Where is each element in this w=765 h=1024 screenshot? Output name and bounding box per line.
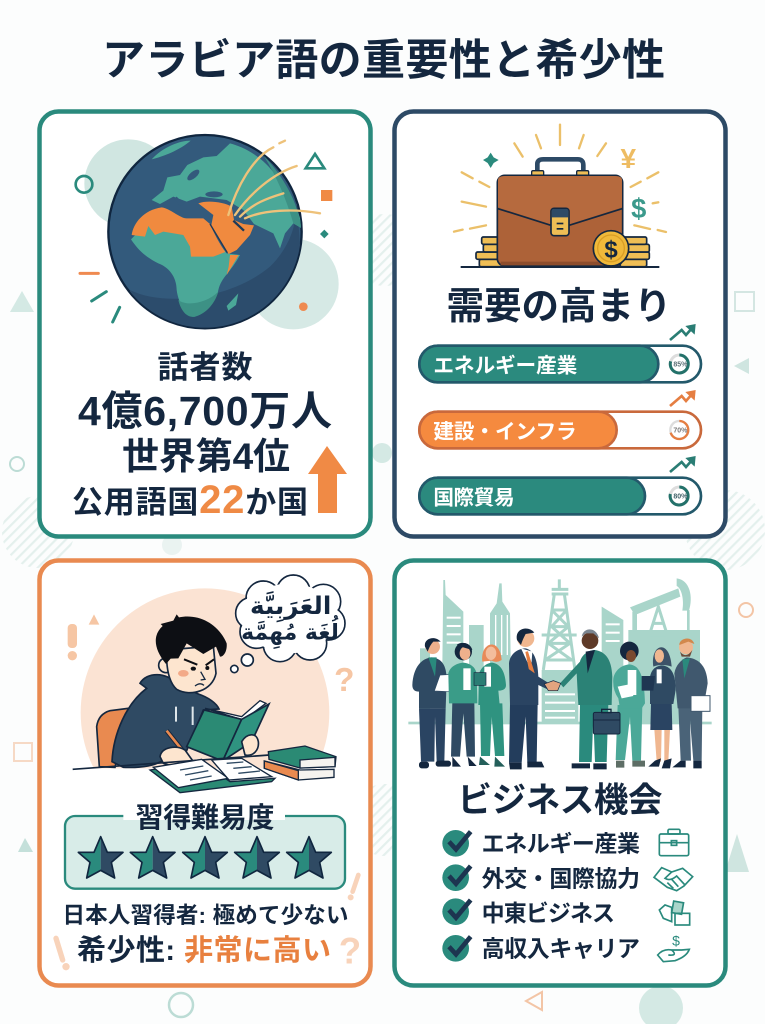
person 6 (613, 642, 645, 768)
panel: speakers (40, 112, 370, 536)
checklist item: high income career (442, 933, 689, 962)
person 2 (448, 643, 477, 767)
person 3 (474, 644, 506, 767)
panel: business (394, 560, 726, 986)
icon: briefcase and coins: $ (631, 193, 646, 224)
checklist item: high income career: $ (672, 933, 680, 949)
demand bars (419, 324, 701, 514)
bar: construction 70%: 70% (673, 427, 688, 434)
briefcase (593, 709, 620, 734)
background decorations (2, 214, 765, 1024)
thought bubble with Arabic: لُغَة مُهِمَّة (241, 615, 339, 649)
person 1 (412, 638, 454, 768)
speakers number: 4億6,700万人 (78, 388, 332, 434)
icon: briefcase and coins (454, 125, 666, 267)
bar: construction 70%: 建設・インフラ (433, 420, 577, 443)
checklist item: diplomacy (442, 864, 693, 892)
bar: energy 85% (419, 324, 701, 382)
Japanese learners note: 日本人習得者: 極めて少ない (62, 903, 348, 928)
world rank: 世界第4位 (122, 436, 290, 477)
checklist item: diplomacy: 外交・国際協力 (482, 866, 640, 892)
thought bubble with Arabic (231, 575, 345, 673)
person 5 (560, 629, 612, 769)
bar: energy 85%: エネルギー産業 (433, 354, 578, 377)
icon: orange up arrow (308, 446, 347, 513)
person 8 (672, 639, 710, 768)
difficulty rating box: ? (339, 930, 361, 971)
panel: demand (394, 112, 726, 536)
bar: trade 80%: 国際貿易 (433, 486, 515, 509)
handshake (544, 681, 561, 691)
panel: difficulty (40, 560, 370, 986)
bar: energy 85%: 85% (673, 361, 688, 368)
person 7 (642, 647, 676, 768)
icon: briefcase and coins: ¥ (621, 143, 637, 174)
title: アラビア語の重要性と希少性 (102, 37, 665, 85)
business checklist (442, 829, 693, 962)
skyline (408, 578, 712, 724)
icon: globe with Arabic world highlighted (76, 135, 339, 333)
difficulty heading: 習得難易度 (136, 802, 274, 833)
bar: construction 70% (419, 390, 701, 448)
illustration: student studying Arabic (68, 574, 353, 794)
five stars (78, 837, 331, 878)
business heading: ビジネス機会 (458, 782, 662, 820)
checklist item: energy (442, 829, 689, 857)
difficulty rating box (56, 810, 361, 971)
thought bubble with Arabic: العَرَبِيَّة (250, 590, 331, 623)
person 4 (509, 629, 552, 769)
bar: trade 80%: 80% (673, 493, 688, 500)
checklist item: Middle East business (442, 898, 690, 926)
illustration: skyline and business people (408, 578, 712, 769)
people shaking hands (412, 629, 710, 769)
illustration: student studying Arabic: ? (334, 662, 355, 699)
rarity: 希少性: 非常に高い (77, 934, 331, 967)
speakers label: 話者数 (158, 350, 252, 385)
checklist item: energy: エネルギー産業 (482, 831, 640, 857)
icon: briefcase and coins: $ (604, 237, 618, 264)
bar: trade 80% (419, 456, 701, 514)
checklist item: high income career: 高収入キャリア (482, 936, 640, 962)
checklist item: Middle East business: 中東ビジネス (482, 900, 615, 926)
official language countries: 公用語国22か国 (72, 478, 308, 522)
demand heading: 需要の高まり (446, 285, 672, 327)
